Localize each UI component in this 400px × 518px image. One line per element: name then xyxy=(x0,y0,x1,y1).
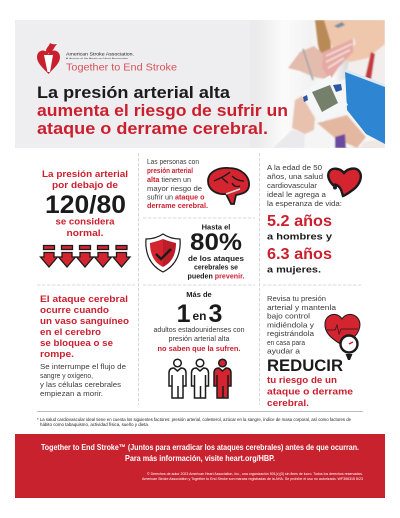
title: La presión arterial alta xyxy=(37,84,231,102)
years gained: 6.3 años xyxy=(267,246,332,263)
stroke definition: se bloquea o se xyxy=(40,338,113,349)
stroke consequences: sangre y oxígeno, xyxy=(40,373,93,380)
stroke consequences: y las células cerebrales xyxy=(40,382,122,389)
header panel xyxy=(15,20,385,148)
risk text: Las personas con xyxy=(147,157,199,166)
life expectancy text: A la edad de 50 xyxy=(267,165,322,172)
copyright: © Derechos de autor 2023 American Heart Association, Inc., una organización 501(c)(3) sin fines de lucro. Todos los derechos reservados. xyxy=(147,472,363,476)
icon: heart and torch xyxy=(37,43,60,74)
check at home text: Revisa tu presión xyxy=(267,296,326,303)
call to action: Para más información, visite heart.org/HBP. xyxy=(125,454,275,463)
copyright xyxy=(142,472,363,481)
stroke consequences: empiezan a morir. xyxy=(40,391,103,398)
icon: person 3 highlighted xyxy=(214,359,231,398)
footnote xyxy=(37,417,352,427)
stroke definition: en el cerebro xyxy=(40,327,101,338)
threshold text xyxy=(42,169,128,239)
icon: three adults xyxy=(169,359,231,398)
risk text: mayor riesgo de xyxy=(147,184,202,193)
threshold text: por debajo de xyxy=(52,180,118,191)
1 in 3 text: no saben que la sufren. xyxy=(158,344,240,353)
years gained: a hombres y xyxy=(267,232,333,242)
panel: 80 percent preventable xyxy=(146,222,244,280)
check at home text: ayudar a xyxy=(267,348,300,356)
reduce callout xyxy=(267,356,353,409)
80 percent text: de los ataques xyxy=(188,254,244,263)
footer banner xyxy=(15,434,385,498)
life expectancy text xyxy=(267,165,342,208)
reduce callout: tu riesgo de un xyxy=(267,375,337,386)
risk text: derrame cerebral. xyxy=(147,201,208,210)
icon: person 2 xyxy=(192,359,208,398)
stroke definition xyxy=(40,294,129,360)
panel: higher risk xyxy=(147,157,249,210)
life expectancy text: años, una salud xyxy=(267,174,323,181)
80 percent text xyxy=(188,222,244,280)
check at home text: bajo control xyxy=(267,314,311,320)
icon: shield with check xyxy=(146,234,180,272)
life expectancy text: ideal le agrega a xyxy=(267,192,326,199)
icon: down arrows xyxy=(40,246,130,267)
stroke definition: ocurre cuando xyxy=(40,305,109,316)
reduce callout: cerebral. xyxy=(267,398,309,409)
stroke definition: un vaso sanguíneo xyxy=(40,316,129,327)
life expectancy text: la esperanza de vida: xyxy=(267,201,342,208)
threshold text: 120/80 xyxy=(45,191,126,219)
80 percent text: cerebrales se xyxy=(194,262,238,272)
title xyxy=(37,84,288,138)
footnote: * La salud cardiovascular ideal tiene en cuenta los siguientes factores: presión arterial, colesterol, azúcar en la sangre, índice de masa corporal, así como factores de xyxy=(37,417,352,422)
80 percent text: Hasta el xyxy=(202,222,230,232)
1 in 3 text: adultos estadounidenses con xyxy=(154,327,245,334)
logo: American Stroke Association: American Stroke Association. xyxy=(66,52,134,56)
stroke consequences xyxy=(40,364,126,398)
threshold text: normal. xyxy=(66,228,104,239)
1 in 3 text: 3 xyxy=(209,300,222,328)
check at home text: midiéndola y xyxy=(267,322,315,330)
years gained: a mujeres. xyxy=(267,264,321,276)
call to action xyxy=(41,443,359,463)
1 in 3 text: Más de xyxy=(186,290,212,299)
icon: heart with pressure gauge xyxy=(325,314,360,360)
80 percent text: pueden prevenir. xyxy=(188,272,244,280)
risk text: alta tienen un xyxy=(147,175,191,184)
1 in 3 text: presión arterial alta xyxy=(168,336,230,343)
risk text: presión arterial xyxy=(147,166,193,175)
threshold text: La presión arterial xyxy=(42,169,128,180)
reduce callout: ataque o derrame xyxy=(267,386,353,398)
stroke consequences: Se interrumpe el flujo de xyxy=(40,364,126,371)
1 in 3 text xyxy=(154,290,245,353)
photo: clinician with blood pressure monitor xyxy=(276,20,385,148)
call to action: Together to End Stroke™ (Juntos para erradicar los ataques cerebrales) antes de que ocurran. xyxy=(41,443,359,452)
panel: life expectancy xyxy=(267,165,361,276)
copyright: American Stroke Association y Together to End Stroke son marcas registradas de la AHA. Se prohíbe el uso no autorizado. WF356315 8/23 xyxy=(142,477,363,481)
threshold text: se considera xyxy=(56,216,115,228)
panel: what a stroke is xyxy=(40,294,129,398)
icon: person 1 xyxy=(169,359,186,398)
title: ataque o derrame cerebral. xyxy=(37,120,268,138)
panel: 1 in 3 adults xyxy=(154,290,245,398)
reduce callout: REDUCIR xyxy=(267,356,343,375)
check at home text xyxy=(267,296,336,356)
years gained xyxy=(267,213,333,276)
panel: blood pressure threshold xyxy=(40,169,130,267)
risk text xyxy=(147,157,208,210)
logo: American Stroke Association xyxy=(37,43,177,74)
check at home text: en casa para xyxy=(267,340,305,347)
icon: brain xyxy=(208,168,249,204)
icon: heart xyxy=(328,169,361,196)
1 in 3 text: 1 xyxy=(177,300,191,328)
logo: American Stroke Association: A division of the American Heart Association xyxy=(66,57,129,60)
stroke definition: rompe. xyxy=(40,349,74,360)
footnote: hábito como tabaquismo, actividad física, sueño y dieta. xyxy=(40,422,149,427)
years gained: 5.2 años xyxy=(267,213,332,230)
check at home text: arterial y mantenla xyxy=(267,305,336,312)
80 percent text: 80% xyxy=(190,229,242,256)
stroke definition: El ataque cerebral xyxy=(40,294,128,305)
risk text: sufrir un ataque o xyxy=(147,192,205,202)
check at home text: registrándola xyxy=(267,331,314,338)
logo: American Stroke Association: Together to End Stroke xyxy=(66,62,177,74)
life expectancy text: cardiovascular xyxy=(267,183,318,190)
1 in 3 text: en xyxy=(192,309,207,323)
panel: check and reduce xyxy=(267,296,360,409)
title: aumenta el riesgo de sufrir un xyxy=(37,102,288,120)
